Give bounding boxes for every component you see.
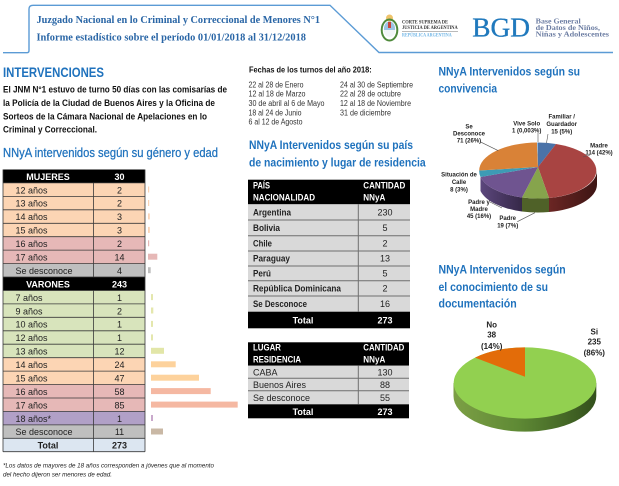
- table: genero y edad: 2: [117, 239, 122, 249]
- pie chart: convivencia: Situación de: [441, 173, 477, 179]
- logo: BGD: de Datos de Niños,: [536, 24, 600, 32]
- table: lugar residencia: Buenos Aires: [253, 380, 307, 390]
- pie chart: documentacion: (14%): [481, 342, 503, 351]
- logo: Corte Suprema: [382, 14, 458, 40]
- table: genero y edad: 243: [112, 279, 127, 289]
- table: genero y edad: Se desconoce: [16, 266, 73, 276]
- table: genero y edad: 7 años: [16, 293, 43, 303]
- table: pais nacionalidad: NNyA: [363, 192, 386, 202]
- table: pais nacionalidad: Se Desconoce: [253, 299, 307, 309]
- table: genero y edad: 3: [117, 212, 122, 222]
- table: genero y edad: 4: [117, 266, 122, 276]
- heading: documentacion: el conocimiento de su: [438, 280, 548, 294]
- logo: BGD: BGD: [472, 13, 530, 43]
- text block: fechas: 12 al 18 de Marzo: [248, 90, 306, 99]
- table: genero y edad: 12 años: [16, 185, 48, 195]
- table: pais nacionalidad: CANTIDAD: [363, 180, 406, 190]
- table: genero y edad: VARONES: [26, 279, 70, 289]
- heading: documentacion: [438, 263, 566, 311]
- table: pais nacionalidad: Total: [293, 316, 313, 326]
- table: genero y edad: 58: [114, 387, 125, 397]
- text block: intervenciones: [3, 85, 227, 136]
- text block: intervenciones: El JNM N°1 estuvo de turno 50 días con las comisarías de: [3, 85, 227, 96]
- table: genero y edad: 1: [117, 320, 122, 330]
- heading: convivencia: convivencia: [438, 82, 497, 96]
- table: genero y edad: Total: [38, 441, 58, 451]
- table: pais nacionalidad: Argentina: [253, 208, 292, 218]
- pie chart: documentacion: [454, 321, 605, 432]
- text block: fechas: 30 de abril al 6 de Mayo: [248, 99, 325, 108]
- pie chart: convivencia: 1 (0,003%): [512, 129, 541, 135]
- table: pais nacionalidad: 2: [382, 284, 388, 294]
- text block: fechas: 12 al 18 de Noviembre: [340, 99, 411, 108]
- table: genero y edad: 13 años: [16, 199, 48, 209]
- text block: fechas: 22 al 28 de octubre: [340, 90, 401, 99]
- table: genero y edad: 13 años: [16, 347, 48, 357]
- table: genero y edad: Se desconoce: [16, 427, 73, 437]
- table: genero y edad: 24: [114, 360, 125, 370]
- table: genero y edad: 17 años: [16, 252, 48, 262]
- table: genero y edad: 12 años: [16, 333, 48, 343]
- pie chart: documentacion: Si: [591, 327, 598, 336]
- table: lugar residencia: 273: [377, 407, 393, 417]
- table: genero y edad: 1: [117, 333, 122, 343]
- header title: Juzgado Nacional en lo Criminal y Correccional de Menores N°1: [36, 15, 320, 26]
- table: genero y edad: 1: [117, 293, 122, 303]
- table: genero y edad: 2: [117, 306, 122, 316]
- pie chart: documentacion: (86%): [584, 349, 605, 358]
- table: genero y edad: 85: [114, 400, 125, 410]
- table: lugar residencia: Se desconoce: [253, 393, 310, 403]
- pie chart: convivencia: [441, 114, 613, 229]
- table: pais nacionalidad: 5: [382, 268, 388, 278]
- table: genero y edad: 30: [114, 172, 125, 182]
- table: pais nacionalidad: Chile: [253, 238, 272, 248]
- heading: intervenciones: INTERVENCIONES: [3, 64, 104, 80]
- table: genero y edad: 17 años: [16, 400, 48, 410]
- pie chart: convivencia: 114 (42%): [585, 150, 613, 156]
- pie chart: convivencia: Se: [465, 124, 473, 130]
- pie chart: convivencia: 8 (3%): [450, 187, 468, 193]
- table: genero y edad: 16 años: [16, 239, 48, 249]
- table: pais nacionalidad: NACIONALIDAD: [253, 192, 315, 202]
- text block: intervenciones: Criminal y Correccional.: [3, 125, 97, 136]
- table: pais nacionalidad: 13: [380, 254, 390, 264]
- table: lugar residencia: Total: [293, 407, 313, 417]
- pie chart: documentacion: No: [486, 321, 497, 330]
- heading: pais y residencia: de nacimiento y lugar de residencia: [249, 156, 426, 170]
- table: genero y edad: 47: [114, 373, 125, 383]
- footnote: del hecho dijeron ser menores de edad.: [3, 472, 112, 479]
- table: pais nacionalidad: Bolivia: [253, 223, 281, 233]
- table: pais nacionalidad: 230: [377, 208, 393, 218]
- text block: fechas: 6 al 12 de Agosto: [248, 118, 303, 127]
- header subtitle: Informe estadístico sobre el período 01/01/2018 al 31/12/2018: [36, 32, 306, 44]
- logo: BGD: Niñas y Adolescentes: [536, 31, 609, 39]
- table: genero y edad: 15 años: [16, 373, 48, 383]
- table: pais nacionalidad: 5: [382, 223, 388, 233]
- logo: Corte Suprema: JUSTICIA DE ARGENTINA: [402, 26, 458, 31]
- table: genero y edad: 14 años: [16, 212, 48, 222]
- heading: convivencia: [438, 65, 580, 96]
- heading: documentacion: NNyA Intervenidos según: [438, 263, 566, 277]
- table: genero y edad: 16 años: [16, 387, 48, 397]
- table: lugar residencia: RESIDENCIA: [253, 354, 301, 364]
- table: genero y edad: 2: [117, 185, 122, 195]
- table: genero y edad: MUJERES: [26, 172, 70, 182]
- logo: BGD: Base General: [536, 17, 581, 25]
- table: genero y edad: 12: [114, 347, 125, 357]
- table: genero y edad: 1: [117, 414, 122, 424]
- pie chart: documentacion: 38: [487, 331, 497, 340]
- heading: convivencia: NNyA Intervenidos según su: [438, 65, 580, 79]
- footnote: [3, 462, 214, 479]
- table: lugar residencia: 130: [377, 367, 393, 377]
- table: lugar residencia: CANTIDAD: [363, 343, 405, 353]
- text block: fechas: 31 de diciembre: [340, 108, 391, 117]
- logo: Corte Suprema: CORTE SUPREMA DE: [402, 21, 449, 26]
- pie chart: convivencia: Vive Solo: [513, 122, 540, 128]
- text block: fechas: 24 al 30 de Septiembre: [340, 80, 413, 89]
- table: lugar residencia: CABA: [253, 367, 278, 377]
- table: pais nacionalidad: 273: [377, 316, 393, 326]
- pie chart: convivencia: 45 (16%): [467, 214, 491, 220]
- text block: intervenciones: Sorteos de la Cámara Nacional de Apelaciones en lo: [3, 112, 207, 122]
- table: genero y edad: [3, 170, 145, 452]
- table: lugar residencia: LUGAR: [253, 343, 281, 353]
- table: pais nacionalidad: 2: [382, 238, 388, 248]
- table: pais nacionalidad: Perú: [253, 268, 271, 278]
- text block: fechas: 22 al 28 de Enero: [248, 80, 304, 89]
- heading: pais y residencia: NNyA Intervenidos según su país: [249, 138, 413, 152]
- pie chart: convivencia: Padre y: [468, 200, 490, 206]
- table: pais nacionalidad: Paraguay: [253, 254, 290, 264]
- pie chart: convivencia: Padre: [499, 216, 517, 222]
- pie chart: convivencia: Madre: [590, 143, 608, 149]
- text block: fechas: [248, 80, 413, 127]
- table: lugar residencia: 55: [380, 393, 390, 403]
- table: lugar residencia: NNyA: [363, 354, 386, 364]
- heading: documentacion: documentación: [438, 297, 517, 311]
- text block: fechas: 18 al 24 de Junio: [248, 108, 302, 117]
- table: genero y edad: 15 años: [16, 226, 48, 236]
- pie chart: convivencia: 15 (5%): [551, 129, 572, 135]
- pie chart: convivencia: Desconoce: [453, 131, 486, 137]
- table: pais nacionalidad: 16: [380, 299, 390, 309]
- table: pais nacionalidad: PAÍS: [253, 180, 270, 190]
- table: lugar residencia: [248, 342, 409, 418]
- pie chart: convivencia: Familiar /: [549, 114, 575, 120]
- table: genero y edad: 273: [112, 441, 127, 451]
- table: genero y edad: 9 años: [16, 306, 43, 316]
- heading: genero y edad: NNyA intervenidos según su género y edad: [3, 146, 218, 160]
- logo: BGD: [472, 13, 609, 43]
- bar chart: mujeres y varones: [148, 186, 238, 434]
- table: lugar residencia: 88: [380, 380, 390, 390]
- table: genero y edad: 10 años: [16, 320, 48, 330]
- pie chart: convivencia: Guardador: [546, 122, 578, 128]
- heading: fechas de turnos: Fechas de los turnos del año 2018:: [249, 65, 372, 75]
- table: pais nacionalidad: República Dominicana: [253, 284, 342, 294]
- table: genero y edad: 11: [115, 427, 124, 437]
- table: genero y edad: 18 años*: [16, 414, 52, 424]
- pie chart: convivencia: Calle: [452, 180, 467, 186]
- header: [3, 5, 613, 53]
- text block: intervenciones: la Policía de la Ciudad de Buenos Aires y la Oficina de: [3, 98, 215, 109]
- logo: Corte Suprema: REPÚBLICA ARGENTINA: [402, 33, 452, 39]
- pie chart: convivencia: 19 (7%): [497, 223, 518, 229]
- table: genero y edad: 3: [117, 226, 122, 236]
- table: pais nacionalidad: [248, 180, 410, 328]
- table: genero y edad: 14: [114, 252, 125, 262]
- table: genero y edad: 2: [117, 199, 122, 209]
- footnote: *Los datos de mayores de 18 años corresponden a jóvenes que al momento: [3, 462, 214, 469]
- pie chart: convivencia: 71 (26%): [457, 139, 481, 145]
- heading: pais y residencia: [249, 138, 426, 170]
- pie chart: convivencia: Madre: [470, 207, 488, 213]
- pie chart: documentacion: 235: [588, 337, 602, 346]
- table: genero y edad: 14 años: [16, 360, 48, 370]
